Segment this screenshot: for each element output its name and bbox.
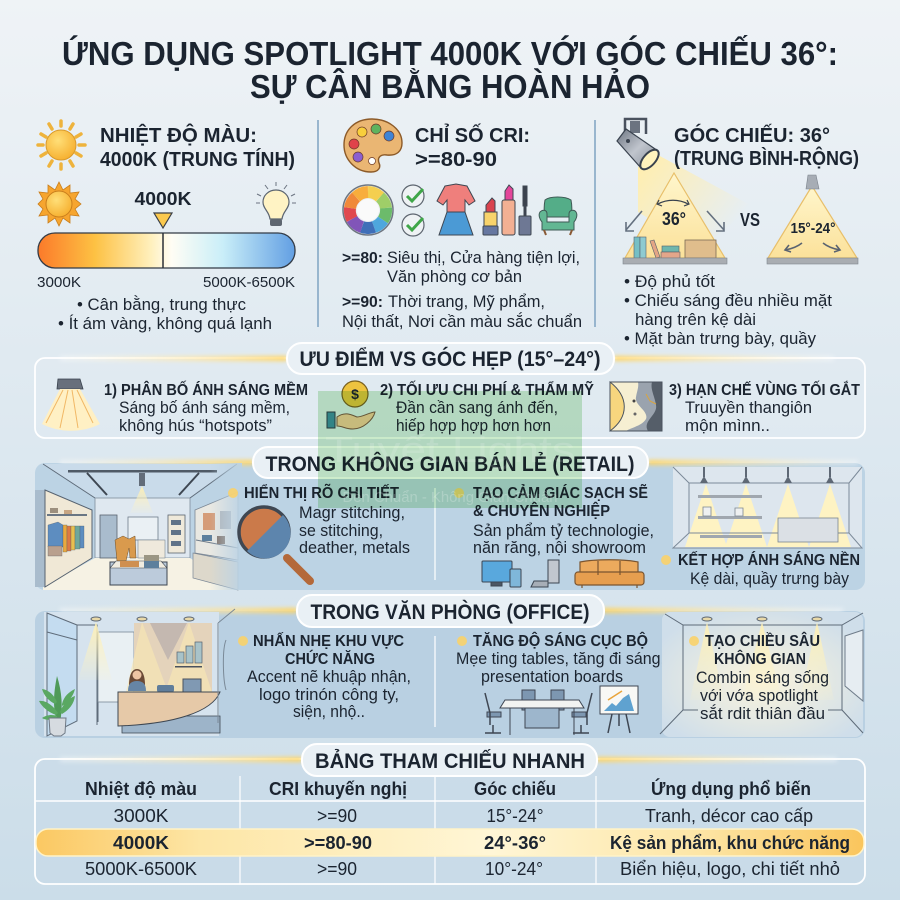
text: local brightness xyxy=(456,632,665,686)
icon: sun xyxy=(38,121,85,169)
illustration: corridor depth xyxy=(660,612,863,737)
icon: devices xyxy=(482,560,559,587)
panel: colour temperature xyxy=(37,121,296,333)
text: temperature notes xyxy=(58,295,272,333)
heading: beam angle: GÓC CHIẾU: 36° xyxy=(674,123,830,147)
text: cost and aesthetics: 2) TỐI ƯU CHI PHÍ & THẨM MỸ xyxy=(380,381,595,399)
text: clean and professional xyxy=(454,484,654,557)
text: cost and aesthetics: hiếp hợp hợp hơn hơn xyxy=(396,417,551,435)
diagram: 36 degree beam xyxy=(623,173,727,264)
table row highlight: 4000K xyxy=(36,829,864,856)
text: CRI usage: Siêu thị, Cửa hàng tiện lợi, xyxy=(387,248,580,267)
icon: spotlight beam xyxy=(638,155,752,250)
diagram: 36 degree beam: 36° xyxy=(662,209,686,229)
text: beam angle notes: • Mặt bàn trưng bày, quầy xyxy=(624,329,816,348)
illustration: meeting table and board xyxy=(485,686,638,735)
text: temperature notes: • Cân bằng, trung thực xyxy=(77,295,246,314)
table row: 4000K: 24°-36° xyxy=(484,833,546,853)
text: functional accents: NHẤN NHẸ KHU VỰC xyxy=(253,633,404,650)
text: beam angle notes xyxy=(624,272,832,348)
chart: colour temperature bar: 3000K xyxy=(37,274,81,291)
text: temperature notes: • Ít ám vàng, không quá lạnh xyxy=(58,314,272,333)
watermark: Đèn Chuẩn - Không Gian Chuẩn xyxy=(342,489,558,506)
text: functional accents: siện, nhộ.. xyxy=(293,703,365,721)
icon: shirt and skirt xyxy=(437,184,475,235)
text: spatial depth: với vớa spotlight xyxy=(700,687,818,705)
icon: warm sun xyxy=(38,182,81,226)
icon: cool bulb xyxy=(256,182,296,226)
watermark: Tuyết Lights xyxy=(325,429,575,470)
icon: soft lamp xyxy=(42,379,100,431)
text: cost and aesthetics xyxy=(380,381,595,435)
text: CRI usage: Văn phòng cơ bản xyxy=(387,267,522,286)
chart: colour temperature bar: 5000K-6500K xyxy=(203,274,295,291)
text: background lighting xyxy=(661,552,860,588)
icon: coin in hand: $ xyxy=(351,386,359,402)
table header row: Ứng dụng phổ biến xyxy=(651,778,811,799)
text: harsh shadows: 3) HẠN CHẾ VÙNG TỐI GẮT xyxy=(669,381,860,399)
left clothing display xyxy=(35,490,92,587)
text: functional accents: Accent nẽ khuập nhận, xyxy=(247,668,411,686)
icon: coin in hand xyxy=(327,381,375,429)
heading: beam angle xyxy=(674,123,859,170)
text: harsh shadows: mộn mìnn.. xyxy=(685,417,770,435)
text: soft distribution xyxy=(104,381,308,435)
watermark xyxy=(318,391,582,508)
text: spatial depth xyxy=(689,632,829,723)
text: soft distribution: 1) PHÂN BỐ ÁNH SÁNG MỀM xyxy=(104,381,308,399)
text: CRI usage: >=90: xyxy=(342,294,383,311)
text: spatial depth: Combin sáng sống xyxy=(696,669,829,687)
table row: 5000K-6500K xyxy=(85,859,840,879)
icon: dark zones xyxy=(610,382,662,431)
table row: 5000K-6500K: 10°-24° xyxy=(485,859,543,879)
text: detail rendering: HIỂN THỊ RÕ CHI TIẾT xyxy=(244,484,400,502)
diagram: narrow beam xyxy=(767,175,858,264)
text: spatial depth: sắt rdit thiân đầu xyxy=(700,704,825,723)
text: spatial depth: TẠO CHIỀU SÂU xyxy=(705,632,820,650)
table row: 5000K-6500K: Biển hiệu, logo, chi tiết nhỏ xyxy=(620,859,840,879)
panel: CRI xyxy=(342,119,582,331)
text: cost and aesthetics: Đần cần sang ánh đến, xyxy=(396,399,558,417)
text: soft distribution: không hús “hotspots” xyxy=(119,417,272,435)
illustration: reception xyxy=(39,609,235,736)
heading: CRI: >=80-90 xyxy=(415,149,497,171)
text: CRI usage xyxy=(342,248,582,331)
icon: magnifying glass xyxy=(239,507,310,581)
table row: 5000K-6500K: 5000K-6500K xyxy=(85,859,197,879)
text: functional accents: logo trinón công ty, xyxy=(259,686,399,704)
heading: colour temperature: 4000K (TRUNG TÍNH) xyxy=(100,148,295,171)
heading pill: office xyxy=(297,595,604,627)
text: clean and professional: năn răng, nội showroom xyxy=(473,539,646,557)
table row: 3000K: 15°-24° xyxy=(486,806,544,826)
diagram: narrow beam: 15°-24° xyxy=(790,221,836,237)
heading: beam angle: (TRUNG BÌNH-RỘNG) xyxy=(674,146,859,170)
table row: 4000K: 4000K xyxy=(113,833,169,853)
right display xyxy=(193,492,238,590)
text: CRI usage: Thời trang, Mỹ phẩm, xyxy=(388,292,545,311)
text: soft distribution: Sáng bố ánh sáng mềm, xyxy=(119,399,290,417)
table row: 4000K: Kệ sản phẩm, khu chức năng xyxy=(610,833,850,853)
table row: 3000K: >=90 xyxy=(317,806,357,826)
table header row: Nhiệt độ màu xyxy=(85,779,197,799)
text: clean and professional: TẠO CẢM GIÁC SẠCH SẼ xyxy=(473,484,648,502)
table row: 3000K: Tranh, décor cao cấp xyxy=(645,806,813,826)
title: ỨNG DỤNG SPOTLIGHT 4000K VỚI GÓC CHIẾU 36°: xyxy=(62,35,838,72)
label: vs: VS xyxy=(740,210,760,230)
icon: palette xyxy=(344,119,402,172)
table header row xyxy=(85,778,811,799)
table header row: CRI khuyến nghị xyxy=(269,779,407,799)
table row: 4000K xyxy=(113,833,850,853)
text: detail rendering xyxy=(228,484,410,557)
heading: CRI xyxy=(415,123,530,171)
title xyxy=(62,35,838,105)
text: CRI usage: Nội thất, Nơi cần màu sắc chuẩn xyxy=(342,312,582,331)
table row: 5000K-6500K: >=90 xyxy=(317,859,357,879)
text: harsh shadows xyxy=(669,381,860,435)
chart: colour temperature bar xyxy=(37,233,295,291)
table row: 3000K xyxy=(114,806,813,826)
heading: colour temperature: NHIỆT ĐỘ MÀU: xyxy=(100,123,257,147)
icon: track spotlight xyxy=(617,119,662,172)
text: detail rendering: se stitching, xyxy=(299,522,383,540)
text: functional accents: CHỨC NĂNG xyxy=(285,650,375,668)
illustration: retail store xyxy=(35,463,242,590)
text: background lighting: KẾT HỢP ÁNH SÁNG NỀN xyxy=(678,552,860,569)
table row: 4000K: >=80-90 xyxy=(304,833,372,853)
table row: 3000K: 3000K xyxy=(114,806,168,826)
heading pill: advantages: ƯU ĐIỂM VS GÓC HẸP (15°–24°) xyxy=(300,347,600,371)
text: background lighting: Kệ dài, quầy trưng bày xyxy=(690,570,850,588)
panel: office xyxy=(35,595,865,738)
table header row: Góc chiếu xyxy=(474,779,556,799)
icon: armchair xyxy=(539,197,577,235)
text: local brightness: presentation boards xyxy=(481,668,623,686)
panel: advantages xyxy=(35,343,865,438)
title: SỰ CÂN BẰNG HOÀN HẢO xyxy=(250,68,650,105)
text: harsh shadows: Truuyền thangiôn xyxy=(685,399,812,417)
heading pill: table: BẢNG THAM CHIẾU NHANH xyxy=(315,748,585,773)
text: clean and professional: Sản phẩm tỷ technologie, xyxy=(473,522,654,540)
label: 4000K marker xyxy=(134,189,192,228)
panel: retail xyxy=(35,447,865,590)
heading: CRI: CHỈ SỐ CRI: xyxy=(415,123,530,147)
text: CRI usage: >=80: xyxy=(342,250,383,267)
text: spatial depth: KHÔNG GIAN xyxy=(714,650,806,668)
heading pill: retail: TRONG KHÔNG GIAN BÁN LẺ (RETAIL) xyxy=(266,451,634,476)
text: detail rendering: deather, metals xyxy=(299,539,410,557)
text: beam angle notes: • Độ phủ tốt xyxy=(624,272,715,291)
illustration: shop shelves under spotlights xyxy=(673,467,862,548)
text: beam angle notes: • Chiếu sáng đều nhiều mặt xyxy=(624,291,832,310)
text: detail rendering: Magr stitching, xyxy=(299,504,405,522)
panel: beam angle xyxy=(617,119,859,348)
heading pill: office: TRONG VĂN PHÒNG (OFFICE) xyxy=(310,599,590,624)
heading: colour temperature xyxy=(100,123,295,171)
panel: quick reference table xyxy=(35,744,865,884)
icon: lipstick xyxy=(483,185,515,235)
icon: colour wheel xyxy=(343,185,393,235)
text: clean and professional: & CHUYÊN NGHIỆP xyxy=(473,502,610,520)
text: local brightness: Mẹe ting tables, tăng đi sáng, xyxy=(456,650,665,668)
text: functional accents xyxy=(238,633,411,721)
text: beam angle notes: hàng trên kệ dài xyxy=(635,310,756,329)
label: 4000K marker: 4000K xyxy=(134,189,192,209)
icon: check marks xyxy=(402,185,424,236)
icon: sofa xyxy=(575,560,644,588)
text: local brightness: TĂNG ĐỘ SÁNG CỤC BỘ xyxy=(473,632,648,650)
icon: mascara xyxy=(519,186,531,235)
